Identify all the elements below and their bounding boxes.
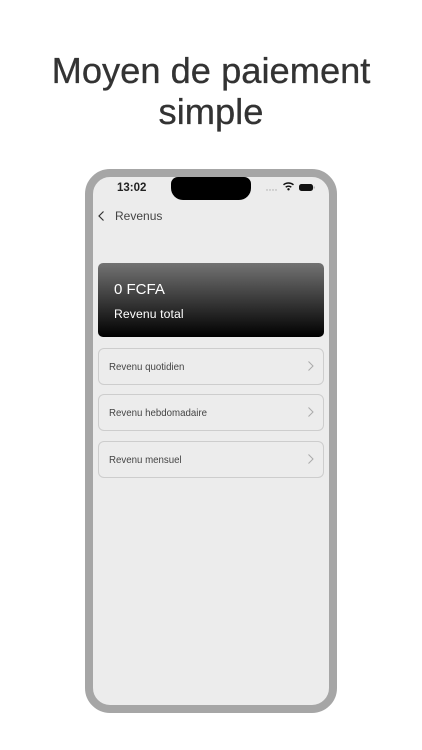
amount: 0 FCFA	[114, 281, 165, 298]
row: weekly revenue	[98, 394, 324, 431]
row: weekly revenue: Revenu hebdomadaire	[109, 408, 207, 418]
status icons	[266, 182, 315, 191]
screen title: Revenus	[115, 209, 162, 223]
row: monthly revenue: Revenu mensuel	[109, 454, 182, 466]
title: Moyen de paiement	[52, 50, 370, 91]
wifi icon	[284, 183, 294, 187]
row: daily revenue	[98, 348, 324, 385]
status time: 13:02	[117, 182, 146, 194]
row: daily revenue: Revenu quotidien	[109, 362, 184, 372]
phone frame	[85, 169, 337, 713]
title	[52, 50, 370, 132]
back arrow	[98, 211, 104, 221]
title: simple	[159, 90, 263, 132]
battery icon	[299, 184, 313, 191]
card label: Revenu total	[114, 307, 184, 321]
revenue card	[98, 263, 324, 337]
dynamic island	[171, 177, 251, 200]
signal dots	[266, 189, 277, 191]
row: monthly revenue	[98, 441, 324, 478]
